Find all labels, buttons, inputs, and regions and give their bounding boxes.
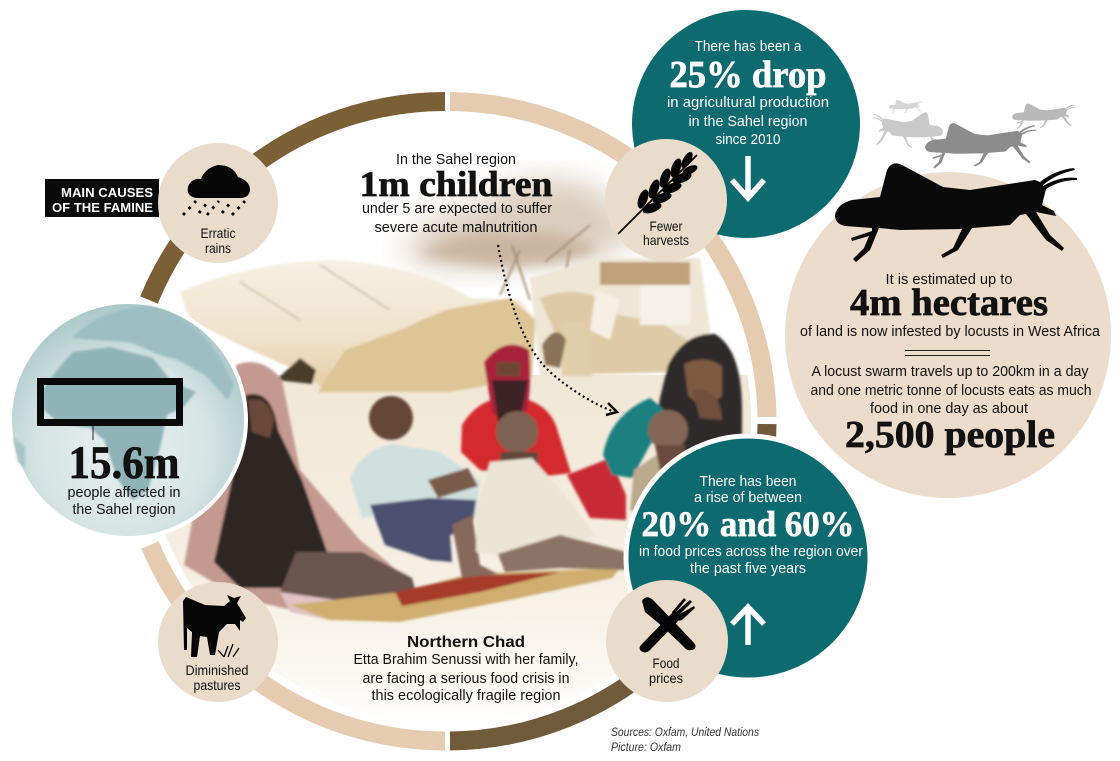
ring: tan lower-left arc xyxy=(150,545,445,741)
text: 1m children: In the Sahel region xyxy=(396,151,516,168)
label: Fewer xyxy=(650,218,683,234)
tent xyxy=(180,260,536,392)
price text: a rise of between xyxy=(694,489,802,506)
locust text: A locust swarm travels up to 200km in a day xyxy=(812,363,1089,380)
panel: locusts xyxy=(785,100,1111,498)
heading: main causes: MAIN CAUSES xyxy=(61,185,153,200)
tan circle xyxy=(785,172,1111,498)
acacia tree and shelter background xyxy=(400,178,716,376)
caption: Northern Chad: Northern Chad xyxy=(407,634,525,651)
label: Diminished xyxy=(186,662,248,678)
text: 1m children: severe acute malnutrition xyxy=(374,219,538,236)
label xyxy=(186,662,248,693)
drop text xyxy=(667,38,829,148)
globe panel xyxy=(8,300,248,540)
price text: 20% and 60% xyxy=(642,504,854,544)
icon: swarm of locusts xyxy=(835,100,1077,262)
icon: rain cloud xyxy=(183,165,250,215)
panel: 25% drop xyxy=(632,10,860,238)
mat xyxy=(290,568,620,622)
ring: dark brown upper-left arc xyxy=(149,102,445,300)
label: Food xyxy=(652,655,680,671)
locust text: It is estimated up to xyxy=(886,271,1012,288)
caption: Northern Chad: Etta Brahim Senussi with her family, xyxy=(354,651,578,668)
photo ground xyxy=(165,375,751,694)
drop text: since 2010 xyxy=(716,131,780,148)
drop text: in the Sahel region xyxy=(688,113,808,130)
text: 1m children: under 5 are expected to suffer xyxy=(362,200,552,217)
caption: Northern Chad: this ecologically fragile region xyxy=(372,687,560,704)
cause: fewer harvests xyxy=(605,139,727,261)
drop text: There has been a xyxy=(694,38,802,55)
caption: Northern Chad: are facing a serious food crisis in xyxy=(362,670,570,687)
price text: in food prices across the region over xyxy=(639,543,863,560)
left woman xyxy=(184,362,418,620)
globe figure: the Sahel region xyxy=(72,501,176,518)
label: prices xyxy=(649,670,683,686)
globe figure xyxy=(68,437,180,518)
icon: goat xyxy=(183,595,246,657)
globe xyxy=(8,300,248,540)
child in white robe xyxy=(476,411,626,572)
Sahel region box xyxy=(40,382,180,422)
label xyxy=(200,225,236,256)
sources xyxy=(611,725,759,754)
boy in striped shirt xyxy=(350,396,498,578)
label xyxy=(643,218,689,248)
ring: dark brown lower-right arc xyxy=(450,424,767,741)
price text: There has been xyxy=(700,473,796,490)
locust text: and one metric tonne of locusts eats as much xyxy=(810,382,1092,399)
locust text: food in one day as about xyxy=(870,400,1029,417)
globe figure: people affected in xyxy=(68,484,180,501)
label: rains xyxy=(205,240,231,256)
cause: diminished pastures xyxy=(158,582,278,702)
icon: wheat xyxy=(618,150,699,234)
right woman and infant xyxy=(603,334,742,520)
map: Europe, Asia and Africa xyxy=(13,306,234,500)
locust text xyxy=(800,271,1101,456)
ring: tan upper-right arc xyxy=(450,102,767,417)
teal circle top xyxy=(632,10,860,238)
cause: erratic rains xyxy=(158,143,278,263)
label: pastures xyxy=(194,677,240,693)
price text xyxy=(639,473,863,577)
label: harvests xyxy=(643,232,689,248)
locust text: 2,500 people xyxy=(845,414,1055,456)
photo: family in Northern Chad xyxy=(140,178,760,725)
locust text: 4m hectares xyxy=(850,282,1048,324)
red cloth xyxy=(567,458,626,520)
arrow: dotted pointer to child xyxy=(498,245,617,415)
text: 1m children xyxy=(360,151,552,236)
cause: food prices xyxy=(606,580,728,702)
label xyxy=(649,655,683,686)
label: Erratic xyxy=(200,225,236,241)
price text: the past five years xyxy=(690,560,806,577)
drop text: in agricultural production xyxy=(667,94,829,111)
teal circle bottom xyxy=(626,436,870,680)
caption: Northern Chad xyxy=(354,634,578,704)
text: 1m children: 1m children xyxy=(360,164,552,204)
region pointer xyxy=(92,426,94,440)
sources: Sources: Oxfam, United Nations xyxy=(611,725,759,739)
heading: main causes xyxy=(45,179,159,217)
sources: Picture: Oxfam xyxy=(611,740,681,754)
icon: knife and fork xyxy=(640,597,696,652)
drop text: 25% drop xyxy=(670,54,826,96)
panel: 20% and 60% xyxy=(626,436,870,680)
locust text: of land is now infested by locusts in West Africa xyxy=(800,323,1101,340)
red-scarfed woman xyxy=(461,345,571,478)
arrow: up xyxy=(732,607,764,645)
heading: main causes: OF THE FAMINE xyxy=(52,200,153,215)
arrow: down xyxy=(732,156,764,198)
globe figure: 15.6m xyxy=(68,437,180,489)
